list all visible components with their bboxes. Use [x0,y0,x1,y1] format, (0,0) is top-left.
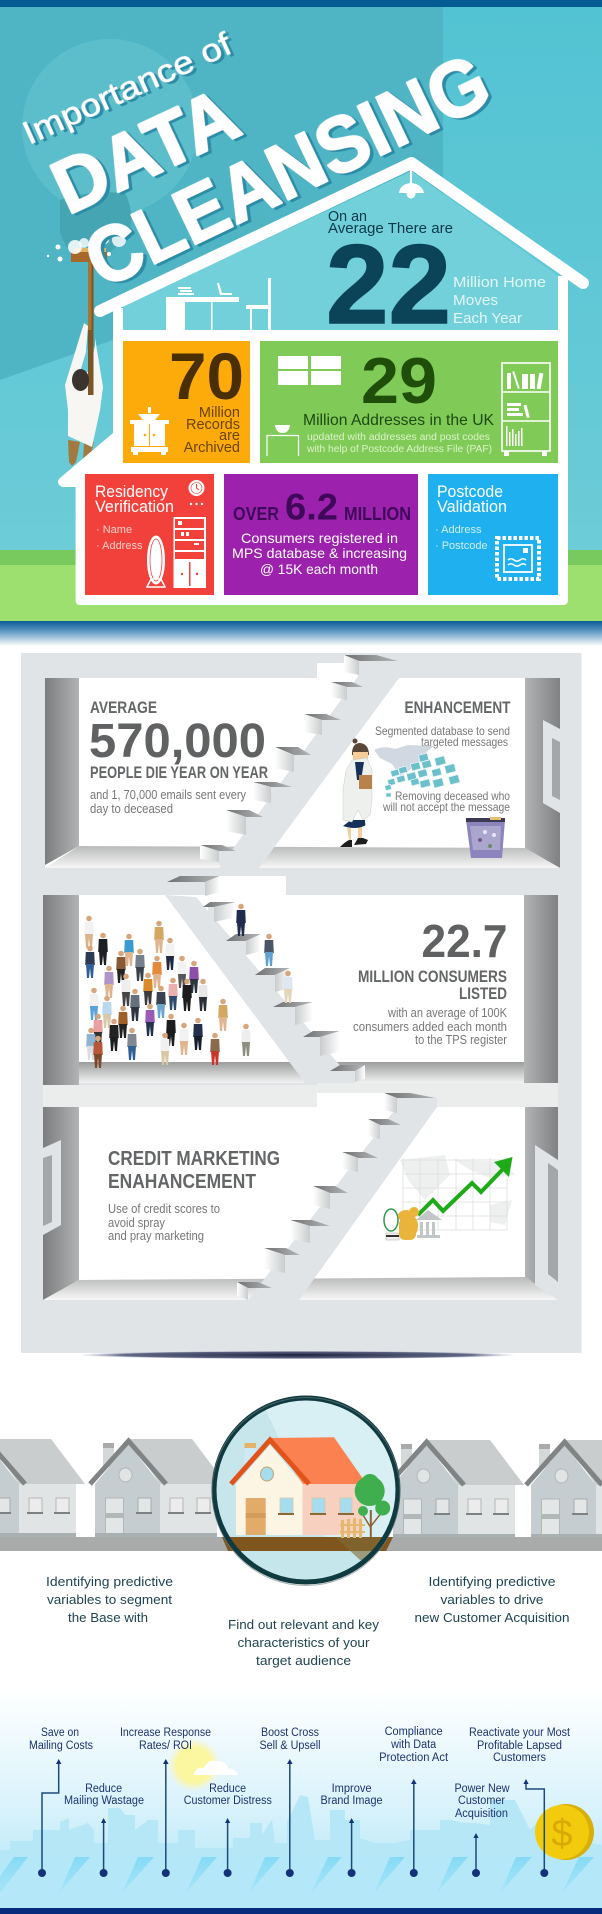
icon: mirror [147,536,165,587]
stairs: room 2 [167,876,365,1083]
text: residency heading [95,483,174,516]
icon: ceiling lamp [399,170,424,198]
text: address details: with help of Postcode Address File (PAF) [306,443,492,455]
label: reduce customer distress: Customer Distress [184,1795,272,1807]
text: credit scores [108,1202,220,1243]
text: records archived: Archived [184,440,240,456]
icon: world map with envelopes [374,745,460,797]
icon: stamp [497,538,539,579]
label: save on mailing costs: Mailing Costs [29,1740,93,1752]
label: compliance: with Data [390,1739,437,1751]
text: records archived: Million [199,405,240,421]
icon: chimney [244,1443,256,1467]
text: segmented database: Removing deceased who [395,789,510,803]
text: million home moves: Moves [453,292,498,309]
label: increase response [120,1727,211,1752]
text: predictive variables left: the Base with [68,1610,148,1625]
text: postcode heading: Validation [437,498,507,516]
title line: Importance of: Importance of [17,26,237,151]
illustration: magnifying lens on house [212,1398,400,1591]
text: characteristics centre [228,1617,380,1668]
text: residency items: · Address [96,540,143,552]
skyline [0,1795,602,1856]
heading: over 6.2 million: MILLION [344,504,411,524]
label: power new customer acquisition: Acquisition [455,1808,508,1820]
chart: growth arrow on world map [384,1155,515,1240]
text: predictive variables right: Identifying predictive [428,1574,556,1589]
icon: windows [280,1498,352,1513]
label: reduce mailing wastage: Mailing Wastage [64,1795,144,1807]
heading: credit marketing enhancement [108,1148,280,1193]
label: compliance: Protection Act [379,1752,449,1764]
icon: gold coin [535,1804,594,1860]
text: enhancement: ENHANCEMENT [404,698,511,717]
text: residency heading: Residency [95,483,169,501]
text: postcode items: · Address [435,524,482,536]
label: boost cross sell: Sell & Upsell [260,1740,320,1752]
text: million home moves: Each Year [453,310,522,327]
label: reduce mailing wastage: Reduce [85,1783,122,1795]
panel: staircase building [21,653,582,1359]
house outline [58,163,583,605]
neighbourhood houses [0,1439,602,1551]
icon: window [278,356,341,385]
text: characteristics centre: target audience [256,1653,351,1668]
stat: 22 million home moves [326,209,546,347]
label: improve brand image [320,1783,382,1807]
panel: over 6.2 million [224,474,418,595]
text: postcode items: · Postcode [435,540,488,552]
number: 29: 29 [361,344,437,417]
title [17,26,503,304]
text: predictive variables left: Identifying predictive [46,1574,173,1589]
text: records archived: are [219,428,240,444]
panel: 70 million records [123,339,250,463]
text: segmented database [375,724,510,814]
text: million home moves: Million Home [453,274,546,291]
text: characteristics centre: characteristics of your [238,1635,370,1650]
number: 70: 70 [169,339,244,413]
room 3 [43,1098,558,1300]
label: compliance [379,1726,449,1764]
text: predictive variables right: new Customer Acquisition [414,1610,570,1625]
illustration: woman with clipboard [340,738,372,847]
stairs: room 1 [200,655,398,865]
label: power new customer acquisition: Customer [458,1795,505,1807]
stat: 22.7 million consumers: LISTED [459,984,507,1003]
text: consumers added: with an average of 100K [387,1006,508,1020]
icon: gold coins [398,1207,419,1240]
icon: drawer cabinet [174,517,206,588]
label: save on mailing costs: Save on [41,1727,79,1739]
text: million addresses: Million Addresses in the UK [303,412,494,429]
benefit arrows [38,1759,548,1877]
stat: 22 million home moves: Average There are [328,221,453,237]
text: postcode heading: Postcode [437,483,503,501]
label: reduce customer distress: Reduce [209,1783,246,1795]
label: save on mailing costs [29,1727,93,1752]
label: increase response: Rates/ ROI [139,1740,192,1752]
label: improve brand image: Improve [332,1783,372,1795]
text: consumers added [353,1006,508,1047]
text: postcode heading [437,483,507,516]
label: reduce mailing wastage [64,1783,144,1807]
icon: sun and cloud [167,1738,238,1792]
benefit labels [29,1726,571,1820]
text: residency items [96,524,143,552]
water reflections [0,1857,594,1893]
panel: postcode validation [428,474,558,595]
text: average 570,000: AVERAGE [90,698,157,717]
text: segmented database: targeted messages [421,735,508,749]
heading: over 6.2 million: OVER [233,504,279,524]
text: characteristics centre: Find out relevant and key [228,1617,380,1632]
text: predictive variables right: variables to drive [440,1592,544,1607]
title line: CLEANSING: CLEANSING [71,36,503,304]
text: emails sent: and 1, 70,000 emails sent every [90,788,247,802]
number: 22.7: 22.7 [422,915,508,967]
text: million home moves [453,274,546,327]
text: consumers added: to the TPS register [415,1033,507,1047]
text: consumers registered: MPS database & increasing [232,545,407,561]
icon: cabinet [130,407,169,455]
room 2 [43,876,558,1107]
text: predictive variables right [414,1574,570,1625]
icon: gold coin: $ [551,1813,573,1855]
panel: hero background [0,0,602,646]
text: on an average: On an [328,209,367,225]
text: records archived: Records [186,417,240,433]
label: increase response: Increase Response [120,1727,211,1739]
text: segmented database: will not accept the message [382,800,510,814]
text: consumers registered [232,530,407,577]
panel: residency verification [85,474,214,595]
label: improve brand image: Brand Image [320,1795,382,1807]
icon: bank [416,1210,442,1238]
title line: DATA: DATA [39,71,251,230]
label: reactivate lapsed customers: Reactivate your Most [469,1727,571,1739]
text: postcode items [435,524,488,552]
icon: door [246,1498,266,1535]
icon: money notes [384,1209,399,1240]
room 1 [45,662,560,868]
number: 22: 22 [326,222,451,347]
icon: tree and fence [340,1474,390,1538]
icon: clock [188,480,204,505]
text: records archived [184,405,240,456]
text: emails sent: day to deceased [90,802,173,816]
text: consumers added: consumers added each month [353,1020,507,1034]
shadow under building [77,1351,517,1359]
panel: 29 million addresses [260,341,558,463]
stairs: room 3 [237,1093,436,1300]
icon: bookshelf [502,363,550,456]
text: residency heading: Verification [95,498,174,516]
text: credit scores: and pray marketing [108,1229,204,1243]
label: reactivate lapsed customers: Customers [493,1752,546,1764]
label: boost cross sell: Boost Cross [261,1727,319,1739]
heading: over 6.2 million [233,486,411,528]
text: address details: updated with addresses and post codes [307,431,490,443]
text: consumers registered: @ 15K each month [260,561,378,577]
text: emails sent [90,788,247,816]
illustration: crowd of people [84,904,293,1068]
heading: over 6.2 million: 6.2 [285,486,338,528]
stat: 22.7 million consumers [358,915,508,1003]
text: residency items: · Name [96,524,132,536]
label: power new customer acquisition: Power New [454,1783,510,1795]
icon: desk and chair [166,278,271,330]
text: predictive variables left: variables to segment [47,1592,172,1607]
icon: waste basket [466,817,505,858]
number: 570,000: 570,000 [89,715,266,768]
illustration: man scrubbing with brush [47,233,126,466]
label: boost cross sell [260,1727,320,1752]
label: power new customer acquisition [454,1783,510,1820]
text: credit scores: Use of credit scores to [108,1202,220,1216]
panel: benefits footer background [0,1690,602,1914]
icon: table and bowl [267,425,298,456]
heading: credit marketing enhancement: CREDIT MARKETING [108,1148,280,1170]
text: address details [306,431,492,455]
label: compliance: Compliance [385,1726,443,1738]
text: average 570,000 [89,698,268,782]
text: average 570,000: PEOPLE DIE YEAR ON YEAR [90,763,268,782]
label: reduce customer distress [184,1783,272,1807]
label: reactivate lapsed customers: Profitable Lapsed [477,1740,562,1752]
text: credit scores: avoid spray [108,1216,166,1230]
text: segmented database: Segmented database to send [375,724,510,738]
text: consumers registered: Consumers registered in [241,530,398,546]
heading: credit marketing enhancement: ENAHANCEMENT [108,1171,256,1193]
label: reactivate lapsed customers [469,1727,571,1764]
text: predictive variables left [46,1574,173,1625]
stat: 22.7 million consumers: MILLION CONSUMERS [358,967,507,986]
